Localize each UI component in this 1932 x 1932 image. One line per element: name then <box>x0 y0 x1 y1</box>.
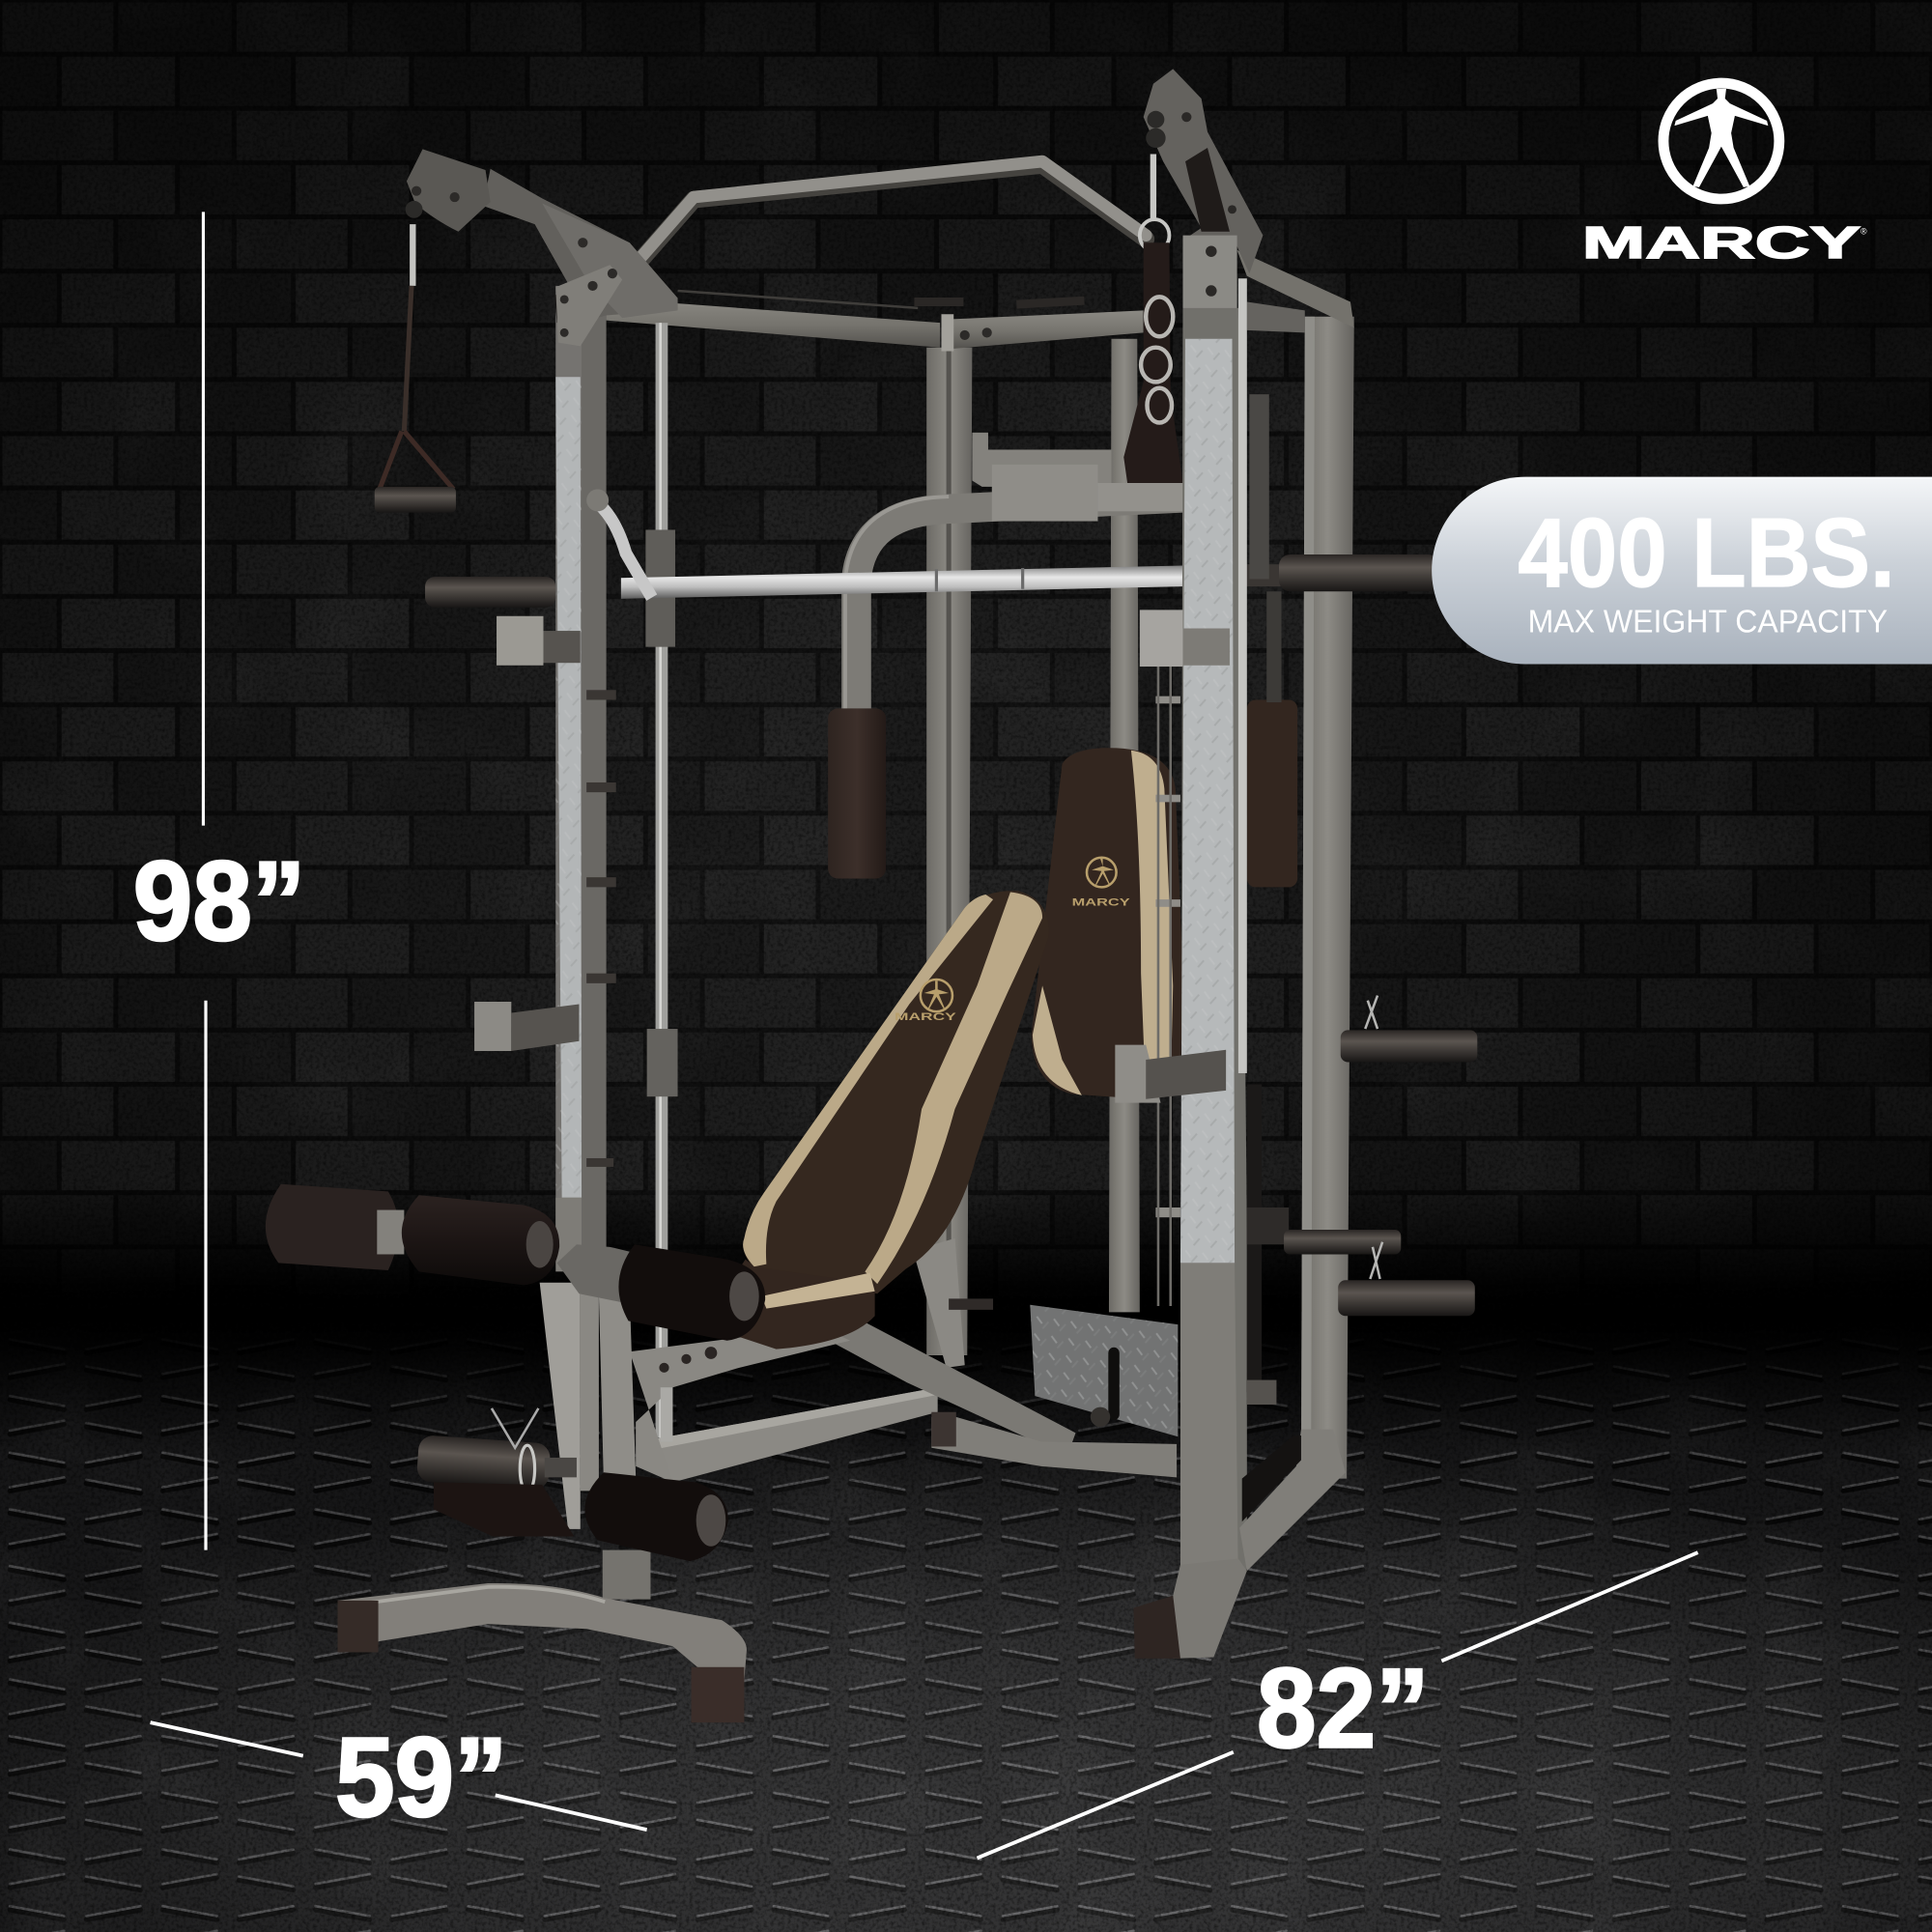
dimension: width 59 <box>151 1714 647 1840</box>
pulley head <box>407 149 491 232</box>
roller 1 upper outer <box>266 1184 399 1270</box>
width label: 59” <box>335 1714 508 1840</box>
weight pegs right <box>1284 996 1477 1316</box>
left guide rod <box>645 323 678 1438</box>
roller 3 front upper <box>618 1244 765 1341</box>
bench seat <box>702 1260 875 1350</box>
logo wordmark: MARCY <box>1582 217 1861 268</box>
right cable arm and pulley tower <box>1123 69 1263 483</box>
safety catches <box>474 610 1230 1103</box>
left stripe <box>743 895 993 1266</box>
front post <box>540 1283 581 1529</box>
roller connector <box>377 1210 404 1254</box>
upper pad logo: MARCY <box>1072 896 1130 908</box>
lower left catch <box>474 1002 579 1051</box>
bench base tubes <box>630 1321 1177 1482</box>
right stripe <box>865 892 1042 1284</box>
upper bench pad <box>1032 748 1182 1099</box>
right base rail and rear foot <box>1133 1430 1346 1659</box>
background: brick wall <box>0 0 1932 1355</box>
Smith bar with weight sleeves <box>425 489 1182 608</box>
right front upright <box>1155 278 1289 1596</box>
roller 2 upper inner <box>402 1195 559 1285</box>
bench pad logo: MARCY <box>895 1011 956 1023</box>
height line top <box>202 212 205 826</box>
height label: 98” <box>133 838 305 964</box>
logo: Marcy <box>1582 83 1867 268</box>
top rear cross beams <box>607 250 1354 352</box>
upper pad logo <box>1072 858 1130 908</box>
collar block <box>992 465 1097 522</box>
press pad right <box>1247 699 1297 887</box>
roller 5 front lower <box>584 1472 728 1561</box>
width line left <box>151 1722 303 1756</box>
dimension: length 82 <box>977 1552 1698 1858</box>
left cable arm and pulley <box>375 149 678 513</box>
callout value: 400 LBS. <box>1518 499 1895 608</box>
background: diamond plate floor <box>0 1182 1932 1932</box>
chrome hook <box>590 497 652 598</box>
base feet <box>337 1601 744 1722</box>
left front upright <box>555 286 607 1271</box>
width line right <box>496 1795 647 1830</box>
U base <box>337 1583 747 1681</box>
rear post <box>599 1293 636 1485</box>
upper left catch <box>497 616 581 666</box>
main incline bench <box>630 891 1177 1482</box>
callout caption: MAX WEIGHT CAPACITY <box>1528 604 1888 639</box>
cable and weight column <box>1158 640 1289 1405</box>
rear right upright <box>1301 317 1354 1479</box>
length label: 82” <box>1257 1645 1430 1772</box>
front right foot <box>1173 1559 1247 1659</box>
registered mark: ® <box>1861 226 1867 236</box>
inner rear upright <box>1109 339 1140 1312</box>
bench strut behind pad <box>913 1238 965 1368</box>
carabiner <box>1151 154 1155 220</box>
left sleeve <box>425 577 555 608</box>
bench pad logo <box>895 980 956 1023</box>
left cable and handle <box>375 201 456 513</box>
foam leg rollers <box>266 1184 765 1561</box>
hanging straps with D rings <box>1123 242 1182 483</box>
length line right <box>1441 1552 1698 1661</box>
roller 4 rear lower <box>434 1482 574 1537</box>
logo ring and figure <box>1663 83 1779 199</box>
leg developer post and base <box>337 1269 747 1722</box>
press pad left <box>828 708 886 878</box>
callout: weight capacity <box>1432 477 1932 665</box>
weight horn lower left <box>416 1408 577 1492</box>
center rear upright <box>926 348 972 1355</box>
peg row on left upright <box>586 690 616 1167</box>
foot plate with diamond tread <box>1030 1305 1178 1436</box>
corner gusset <box>555 265 622 346</box>
chrome bar <box>621 565 1182 599</box>
callout pill <box>1432 477 1932 665</box>
pivot bracket <box>557 1244 640 1303</box>
base column <box>603 1550 650 1600</box>
bench pad <box>743 891 1049 1293</box>
length line left <box>977 1752 1234 1858</box>
right sleeve <box>1238 554 1439 591</box>
right catches <box>1115 610 1230 1103</box>
press arm with pads <box>828 433 1297 887</box>
machine: Smith cage frame <box>555 250 1354 1479</box>
height line bottom <box>205 1001 207 1550</box>
top lat bar <box>625 161 1146 278</box>
